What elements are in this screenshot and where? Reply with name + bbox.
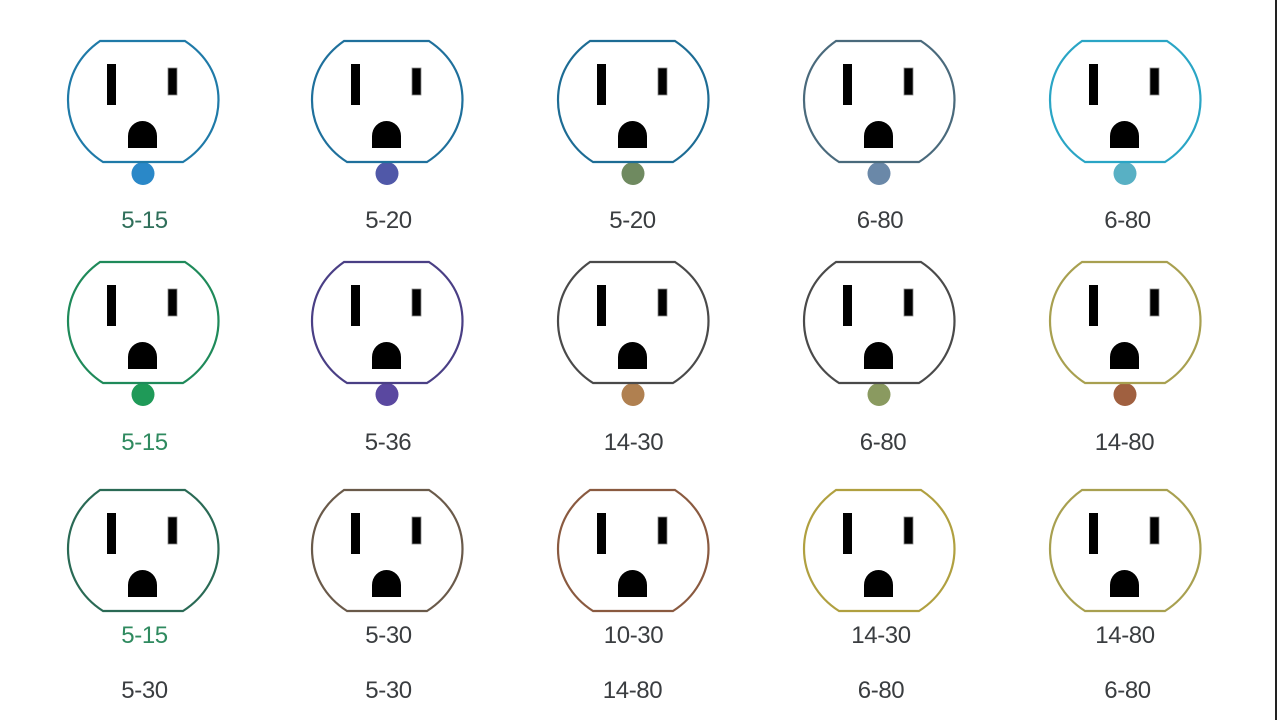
labels row 3: 5-15 xyxy=(121,622,168,649)
outlet 14-80 olive gold xyxy=(1050,490,1200,611)
outlet 14-30 grey xyxy=(558,262,708,406)
labels row 3: 14-30 xyxy=(851,622,911,649)
labels row 3 xyxy=(121,622,1155,649)
outlet 14-30 gold xyxy=(804,490,954,611)
labels row 2: 6-80 xyxy=(860,429,906,456)
labels row 3: 14-80 xyxy=(1095,622,1155,649)
labels row 4: 6-80 xyxy=(1104,677,1151,704)
outlet 5-20 olive dot xyxy=(558,41,708,185)
labels row 3: 5-30 xyxy=(365,622,412,649)
outlet 6-30 slate xyxy=(804,41,954,185)
labels row 1: 6-80 xyxy=(1104,207,1151,234)
outlet 14-80 olive xyxy=(1050,262,1200,406)
labels row 1: 6-80 xyxy=(857,207,903,234)
labels row 2: 14-80 xyxy=(1095,429,1154,456)
page right border xyxy=(1275,0,1277,720)
labels row 4: 14-80 xyxy=(603,677,662,704)
labels row 1 xyxy=(121,207,1151,234)
labels row 3: 10-30 xyxy=(604,622,663,649)
outlet 6-30 cyan xyxy=(1050,41,1200,185)
labels row 2: 5-36 xyxy=(365,429,411,456)
labels row 4: 6-80 xyxy=(858,677,904,704)
outlet 5-30 brown xyxy=(312,490,462,611)
outlet 5-15 green xyxy=(68,262,218,406)
outlet 5-15 blue xyxy=(68,41,218,185)
labels row 2: 5-15 xyxy=(121,429,168,456)
outlet 6-80 grey xyxy=(804,262,954,406)
labels row 2: 14-30 xyxy=(604,429,663,456)
outlet 5-20 indigo xyxy=(312,41,462,185)
outlet 5-15 dark green xyxy=(68,490,218,611)
labels row 1: 5-20 xyxy=(365,207,412,234)
labels row 1: 5-20 xyxy=(609,207,656,234)
labels row 1: 5-15 xyxy=(121,207,168,234)
labels row 4 xyxy=(121,677,1151,704)
labels row 2 xyxy=(121,429,1154,456)
labels row 4: 5-30 xyxy=(121,677,168,704)
outlet 10-30 rust xyxy=(558,490,708,611)
labels row 4: 5-30 xyxy=(365,677,412,704)
outlet 5-36 purple xyxy=(312,262,462,406)
